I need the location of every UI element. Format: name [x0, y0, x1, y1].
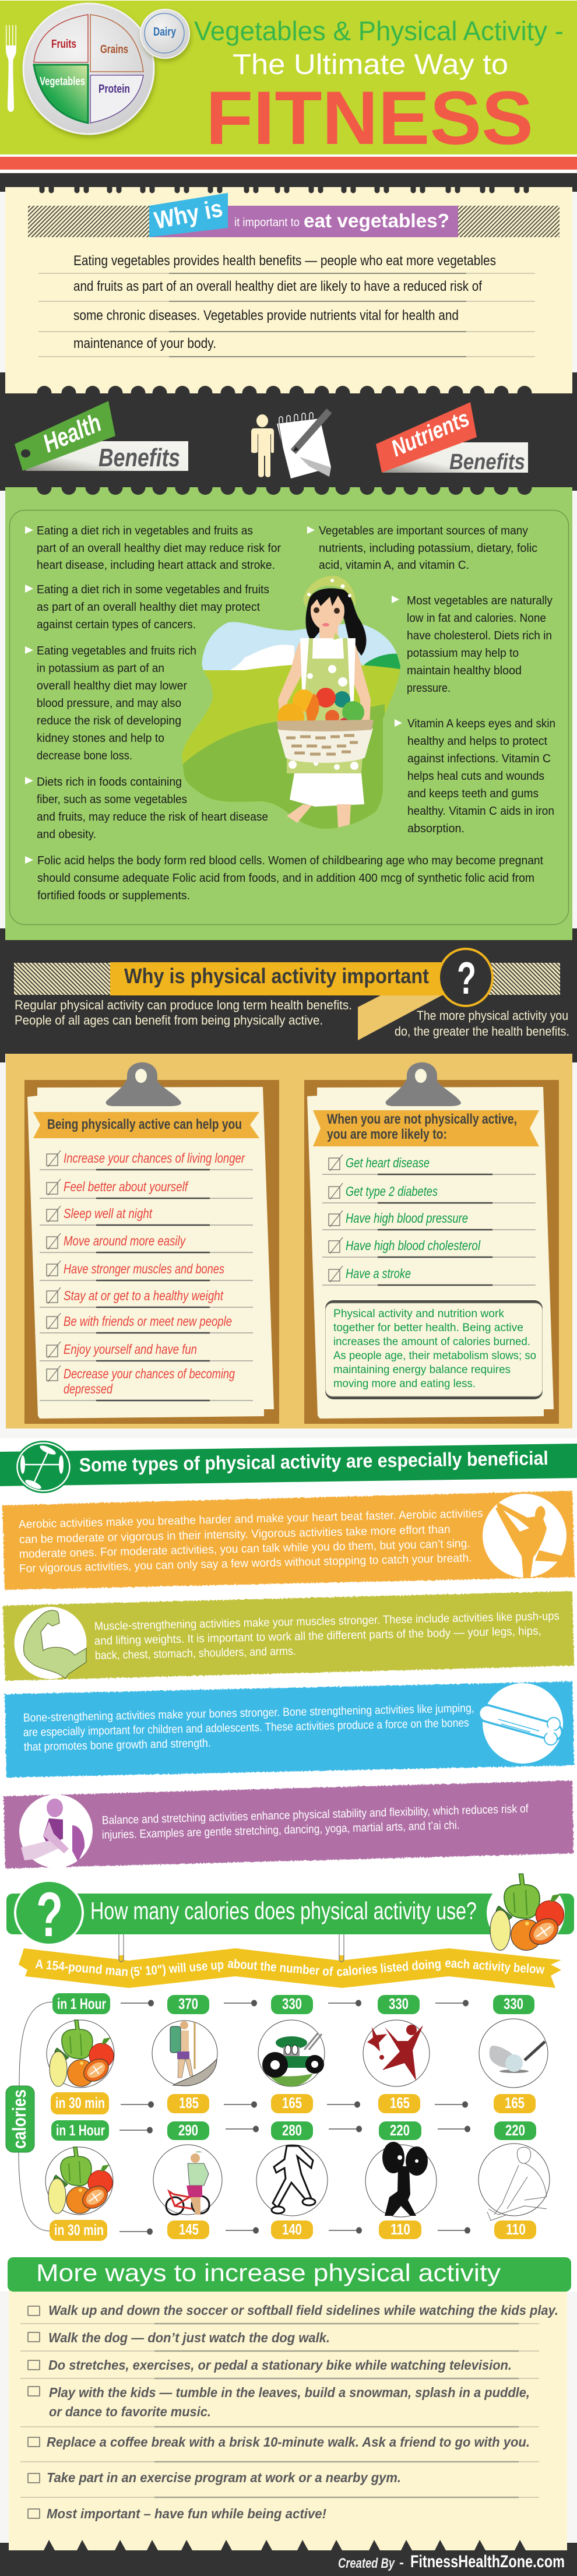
row: in 30 min: in 30 min [55, 2094, 105, 2112]
icon: flexed arm [14, 1607, 86, 1679]
checklist: ideas [28, 2303, 558, 2521]
label: calories: calories [9, 2089, 30, 2149]
text block: health benefits list: decrease bone loss. [37, 749, 132, 762]
icon: dairy cup [140, 9, 189, 58]
icon: fork [6, 25, 16, 112]
checklist: benefits: Sleep well at night [64, 1206, 153, 1221]
illustration: girl with vegetable basket [175, 576, 408, 833]
checklist: ideas: Play with the kids — tumble in the leaves, build a snowman, splash in a puddle, [49, 2385, 530, 2400]
label: nutrients benefits: Nutrients [388, 406, 473, 462]
text block: aerobic: For vigorous activities, you can only say a few words without stopping to catch your breath. [19, 1551, 472, 1575]
text block: nutrients benefits list: low in fat and calories. None [407, 612, 546, 625]
row: in 30 min: 185 [179, 2094, 199, 2112]
icon: person with notepad [251, 411, 331, 478]
label: health benefits: Health [39, 409, 105, 458]
text block: muscle [94, 1610, 560, 1662]
icon: hiker [152, 2021, 217, 2086]
checklist: ideas: Walk the dog — don’t just watch the dog walk. [48, 2330, 330, 2345]
row: in 1 hour: in 1 Hour [57, 1995, 106, 2012]
row: in 30 min second: 110 [506, 2220, 526, 2238]
heading: types of physical activity: Some types of physical activity are especially beneficial [79, 1447, 548, 1476]
icon: plate [23, 3, 154, 134]
text block: muscle: back, chest, stomach, shoulders, and arms. [95, 1645, 296, 1662]
row: in 30 min second: 145 [179, 2220, 199, 2238]
text block: nutrients benefits list: Vitamin A keeps eyes and skin [407, 717, 555, 730]
icon: dumbbells [15, 1441, 72, 1493]
icon: cyclist [153, 2145, 222, 2215]
text block: nutrients benefits list: potassium may help to [407, 647, 519, 660]
icon: golf club and ball [479, 2019, 548, 2088]
label: nutrients benefits [376, 402, 528, 474]
text block: nutrients benefits list: against infections. Vitamin C [407, 752, 551, 765]
icon: dancers [363, 2020, 430, 2086]
text block: health benefits list: overall healthy diet may lower [37, 680, 187, 692]
text block: bone: Bone-strengthening activities make your bones stronger. Bone strengthening activities like jumping, [23, 1702, 474, 1725]
title: The Ultimate Way to [233, 49, 508, 80]
panel: bone [5, 1681, 574, 1778]
connector curves [19, 2002, 52, 2231]
callout: nutrition note: Physical activity and nutrition work [333, 1308, 505, 1320]
row: in 30 min second: in 30 min [54, 2221, 104, 2239]
checklist: benefits: Increase your chances of living longer [64, 1150, 245, 1166]
text block: aerobic: Aerobic activities make you breathe harder and make your heart beat faster. Aerobic activities [19, 1507, 483, 1531]
banner: you are more likely to: [327, 1127, 447, 1142]
row: in 1 hour second: 220 [505, 2121, 525, 2139]
text block: bone: that promotes bone growth and strength. [24, 1737, 211, 1754]
icon: bone [483, 1683, 563, 1764]
icon: question mark [439, 949, 492, 1006]
basket [277, 720, 374, 763]
checklist: risks: Get type 2 diabetes [346, 1184, 438, 1199]
text block: bone [23, 1702, 474, 1754]
checklist: benefits: Be with friends or meet new people [64, 1314, 232, 1329]
icon: question mark circle [14, 1879, 84, 1949]
callout: nutrition note: together for better health. Being active [333, 1322, 523, 1334]
checklist: risks: Have high blood cholesterol [346, 1238, 481, 1253]
icon: plate: Protein [98, 83, 130, 96]
heading: calories [6, 1874, 574, 1950]
hair back [306, 588, 366, 656]
text block: nutrients benefits list: Most vegetables are naturally [407, 594, 553, 607]
text block: nutrients benefits list: Vegetables are important sources of many [319, 525, 528, 537]
text block: vegetables intro: Eating vegetables provides health benefits — people who eat more vegetables [73, 253, 496, 269]
row: in 1 hour [52, 1993, 534, 2014]
checklist: risks: Have high blood pressure [346, 1210, 468, 1226]
checklist: benefits: Stay at or get to a healthy weight [64, 1288, 224, 1303]
title: Vegetables & Physical Activity - [194, 16, 564, 46]
clipboard: being active [24, 1062, 279, 1424]
checklist: risks: Have a stroke [346, 1266, 411, 1281]
text block: balance: Balance and stretching activities enhance physical stability and flexibility, which reduces risk of [102, 1803, 529, 1827]
text block: vegetables intro: some chronic diseases. Vegetables provide nutrients vital for health and [73, 308, 459, 323]
panel: dark benefits band [0, 372, 577, 491]
arms and neck [319, 627, 338, 641]
checklist: benefits: Enjoy yourself and have fun [64, 1342, 197, 1357]
heading: types of physical activity [0, 1441, 577, 1493]
icon: question mark circle: ? [36, 1879, 63, 1949]
icon: walker [256, 2145, 328, 2216]
row: in 30 min: 165 [505, 2094, 525, 2112]
icon: plate: Grains [100, 43, 128, 56]
text block: health benefits list: Eating a diet rich in vegetables and fruits as [37, 525, 253, 537]
text block: more activity [395, 1008, 569, 1039]
label: nutrients benefits: Benefits [449, 450, 525, 474]
row: in 30 min second: 110 [390, 2220, 410, 2238]
header panel [0, 1, 577, 160]
text block: benefits [15, 998, 352, 1027]
text block: health benefits list: against certain types of cancers. [37, 618, 196, 631]
row: in 1 hour second: 220 [390, 2121, 410, 2139]
text block: nutrients benefits list: nutrients, including potassium, dietary, folic [319, 542, 537, 555]
heading: why is: eat vegetables? [304, 210, 449, 231]
text block: aerobic: can be moderate or vigorous in their intensity. Vigorous activities take more effort than [19, 1523, 451, 1546]
row: in 30 min second [50, 2220, 536, 2241]
text block: nutrients benefits list: pressure. [407, 682, 451, 695]
banner: 154-pound man: about the number of [227, 1956, 334, 1979]
footer: Created By [338, 2556, 395, 2571]
chart: calories table [6, 1993, 550, 2241]
text block: nutrients benefits list [307, 525, 555, 835]
text block: benefits: People of all ages can benefit from being physically active. [15, 1013, 323, 1027]
checklist: benefits: Feel better about yourself [64, 1179, 189, 1194]
checklist: ideas: Walk up and down the soccer or softball field sidelines while watching the kids play. [48, 2303, 558, 2318]
clipboard: not active [304, 1062, 559, 1424]
text block: health benefits list: Eating a diet rich in some vegetables and fruits [37, 583, 269, 596]
checklist: benefits: Move around more easily [64, 1233, 186, 1248]
label: health benefits [15, 401, 188, 472]
icon: fruit and vegetables [487, 1874, 565, 1950]
text block: health benefits list: and fruits, may reduce the risk of heart disease [37, 811, 268, 824]
text block: health benefits list: part of an overall healthy diet may reduce risk for [37, 542, 281, 555]
row: in 30 min second: 140 [282, 2220, 302, 2238]
row: in 30 min: 165 [390, 2094, 410, 2112]
icon: plate: Fruits [51, 38, 76, 51]
checklist: benefits: Decrease your chances of becoming [64, 1366, 235, 1381]
row: in 1 hour: 330 [282, 1995, 302, 2012]
text block: nutrients benefits list: acid, vitamin A, and vitamin C. [319, 559, 469, 572]
checklist: ideas: Do stretches, exercises, or pedal a stationary bike while watching television. [48, 2357, 512, 2373]
checklist: ideas: Replace a coffee break with a brisk 10-minute walk. Ask a friend to go with you. [47, 2434, 530, 2450]
text block: nutrients benefits list: absorption. [407, 822, 465, 835]
row: in 1 hour second [51, 2120, 536, 2141]
title: FITNESS [206, 75, 533, 160]
text block: health benefits list: kidney stones and help to [37, 732, 164, 745]
text block: muscle: and lifting weights. It is important to work all the different parts of the body — your legs, hips, [94, 1625, 541, 1648]
panel: why eat vegetables [0, 173, 577, 393]
text block: health benefits list: Folic acid helps the body form red blood cells. Women of childbearing age who may become pregnant [37, 854, 543, 867]
checklist: ideas: or dance to favorite music. [49, 2404, 211, 2419]
text block: health benefits list [25, 525, 543, 902]
heading: why is [28, 193, 560, 237]
banner: Being physically active can help you [47, 1117, 242, 1132]
panel: muscle [3, 1591, 574, 1681]
heading: more ways: More ways to increase physical activity [36, 2259, 501, 2286]
panel: why physical activity [0, 928, 577, 1062]
heading: more ways [8, 2257, 571, 2292]
text block: balance: injuries. Examples are gentle stretching, dancing, yoga, martial arts, and t’ai chi. [102, 1819, 460, 1842]
text block: nutrients benefits list: maintain healthy blood [407, 664, 522, 677]
checklist: benefits [40, 1150, 253, 1400]
heading: why is physical activity important [14, 962, 560, 1040]
banner: 154-pound man: A 154-pound man [35, 1956, 129, 1979]
checklist: ideas: Take part in an exercise program at work or a nearby gym. [47, 2470, 401, 2485]
banner: 154-pound man: calories listed doing [336, 1956, 442, 1979]
head [303, 576, 356, 640]
callout: nutrition note [325, 1300, 543, 1399]
checklist: risks: Get heart disease [346, 1155, 430, 1170]
text block: benefits: Regular physical activity can produce long term health benefits. [15, 998, 352, 1012]
checklist: risks [322, 1155, 536, 1285]
text block: aerobic: moderate ones. For moderate activities, you can talk while you do them, but you can’t sing. [19, 1537, 470, 1561]
text block: vegetables intro [73, 253, 496, 351]
banner: 154-pound man: each activity below [445, 1955, 546, 1977]
row: in 1 hour second: 280 [282, 2121, 302, 2139]
icon: stretching woman [19, 1794, 93, 1868]
text block: health benefits list: in potassium as part of an [37, 662, 164, 675]
checklist: benefits: depressed [64, 1381, 113, 1396]
callout: nutrition note: increases the amount of calories burned. [333, 1336, 530, 1348]
text block: health benefits list: Diets rich in foods containing [37, 776, 182, 789]
vegetables [277, 688, 364, 734]
text block: health benefits list: as part of an overall healthy diet may protect [37, 601, 260, 614]
callout: nutrition note: maintaining energy balance requires [333, 1364, 511, 1376]
panel: more ways [8, 2257, 571, 2550]
text block: nutrients benefits list: healthy. Vitamin C aids in iron [407, 805, 554, 818]
row: in 1 hour: 330 [389, 1995, 409, 2012]
icon: weightlifter [365, 2142, 437, 2217]
callout: nutrition note: As people age, their metabolism slows; so [333, 1350, 536, 1362]
banner [313, 1110, 539, 1146]
text block: nutrients benefits list: healthy and helps to protect [407, 735, 547, 748]
row: in 30 min [51, 2092, 536, 2114]
icon: aerobic figure [483, 1494, 567, 1578]
heading: why is: Why is [152, 194, 225, 234]
row: in 1 hour second: in 1 Hour [56, 2121, 105, 2139]
title [194, 16, 564, 160]
callout: nutrition note: moving more and eating less. [333, 1378, 476, 1390]
checklist: ideas: Most important – have fun while being active! [47, 2506, 326, 2521]
icon: dairy cup: Dairy [153, 26, 177, 38]
icon: fruit circle 2 [45, 2147, 113, 2215]
panel: aerobic [2, 1491, 575, 1590]
text block: nutrients benefits list: have cholesterol. Diets rich in [407, 629, 552, 642]
text block: vegetables intro: and fruits as part of an overall healthy diet are likely to have a reduced risk of [73, 279, 482, 294]
heading: why is physical activity important: Why is physical activity important [124, 964, 429, 988]
label: calories [6, 2086, 34, 2152]
icon: lawn mower [258, 2020, 325, 2086]
skirt and legs [287, 758, 363, 773]
row: in 30 min: 165 [282, 2094, 302, 2112]
text block: balance [102, 1803, 529, 1842]
checklist: benefits: Have stronger muscles and bones [64, 1261, 224, 1276]
text block: vegetables intro: maintenance of your body. [73, 336, 216, 351]
text block: health benefits list: blood pressure, and may also [37, 697, 181, 710]
row: in 1 hour: 330 [504, 1995, 523, 2012]
text block: nutrients benefits list: helps heal cuts and wounds [407, 770, 544, 783]
row: in 1 hour second: 290 [178, 2121, 198, 2139]
icon: stretching man [479, 2144, 550, 2220]
heading: why is: it important to [234, 216, 300, 229]
text block: bone: are especially important for children and adolescents. These activities produce a force on the bones [23, 1716, 469, 1739]
panel: clipboards [6, 1054, 572, 1428]
icon: plate: Vegetables [40, 75, 85, 88]
banner: 154-pound man [19, 1948, 561, 1988]
panel: benefits [5, 480, 572, 940]
text block: health benefits list: fortified foods or supplements. [37, 889, 190, 902]
text block: nutrients benefits list: and keeps teeth and gums [407, 787, 539, 800]
text block: health benefits list: should consume adequate Folic acid from foods, and in addition 400 mcg of synthetic folic acid from [37, 872, 534, 885]
text block: health benefits list: heart disease, including heart attack and stroke. [37, 559, 275, 572]
banner: When you are not physically active, [327, 1111, 517, 1127]
row: in 1 hour: 370 [178, 1995, 198, 2012]
text block: health benefits list: fiber, such as some vegetables [37, 793, 187, 806]
icon: fruit circle 1 [47, 2020, 114, 2088]
label: health benefits: Benefits [98, 444, 180, 472]
icon: question mark: ? [457, 952, 476, 1004]
footer: - [399, 2555, 404, 2571]
text block: health benefits list: reduce the risk of developing [37, 715, 181, 727]
footer [0, 2540, 577, 2576]
text block: health benefits list: and obesity. [37, 828, 96, 841]
panel: balance [3, 1780, 574, 1868]
banner [33, 1112, 259, 1138]
banner: 154-pound man: (5' 10") will use up [129, 1957, 224, 1979]
text block: health benefits list: Eating vegetables and fruits rich [37, 645, 196, 657]
text block: aerobic [19, 1507, 483, 1575]
